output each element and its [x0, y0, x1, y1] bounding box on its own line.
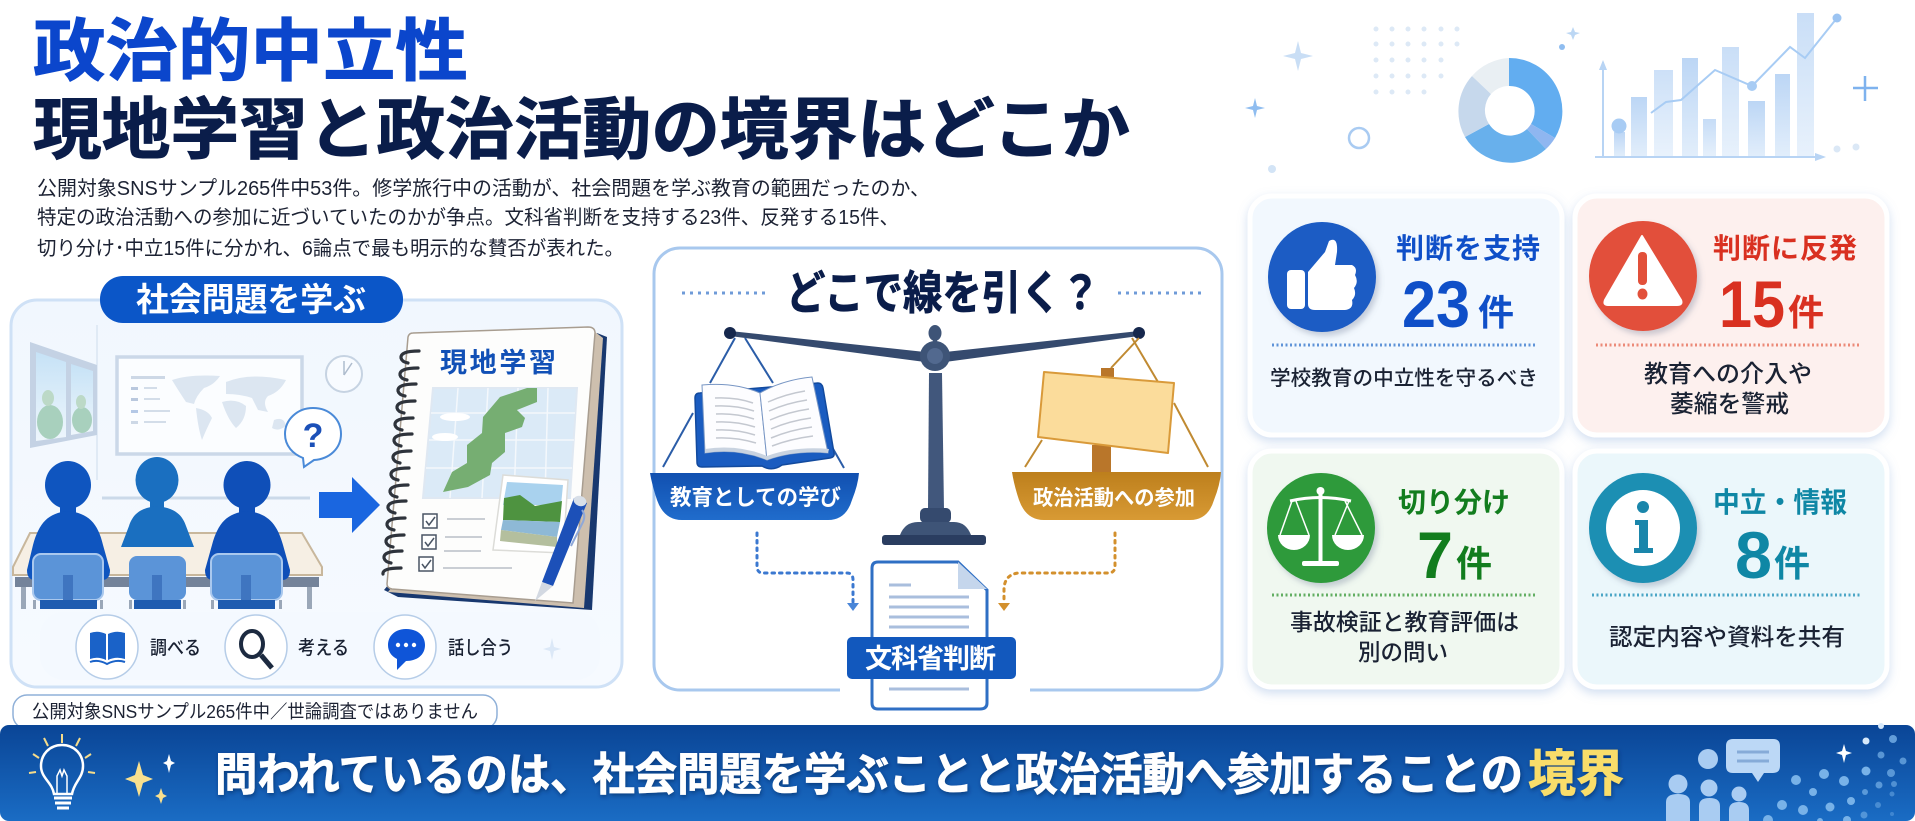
intro text block: 特定の政治活動への参加に近づいていたのかが争点。文科省判断を支持する23件、反発する15件、 — [37, 206, 899, 229]
card: 判断を支持 23件 — [1250, 196, 1562, 435]
document: 文科省判断 — [847, 562, 1016, 709]
icon row: study actions — [76, 615, 561, 679]
notebook title: 現地学習 — [440, 348, 556, 378]
icon: sparkles — [125, 754, 175, 804]
action: 調べる — [76, 615, 201, 679]
title: 政治的中立性: 政治的中立性 — [33, 14, 468, 90]
arrow — [319, 477, 380, 533]
icon: question speech bubble — [285, 408, 341, 467]
notebook map — [423, 388, 577, 498]
bar and line chart — [1595, 13, 1842, 161]
action: 調べる: 調べる — [150, 638, 201, 659]
icon: light bulb — [29, 734, 95, 808]
icon: information — [1589, 473, 1697, 583]
description: 学校教育の中立性を守るべき — [1270, 367, 1538, 390]
document: 文科省判断: 文科省判断 — [865, 644, 996, 674]
count — [1402, 267, 1514, 341]
description: 別の問い — [1358, 639, 1448, 665]
icon: thumbs up — [1268, 222, 1376, 332]
action: 話し合う: 話し合う — [448, 637, 513, 659]
banner message: 問われているのは、社会問題を学ぶことと政治活動へ参加することの — [215, 749, 1523, 800]
count: 8 — [1735, 518, 1772, 592]
intro text block: 公開対象SNSサンプル265件中53件。修学旅行中の活動が、社会問題を学ぶ教育の範囲だったのか、 — [37, 177, 930, 200]
notebook photo — [493, 475, 568, 553]
student: centre — [121, 457, 194, 609]
student: right — [205, 461, 290, 609]
description: 萎縮を警戒 — [1670, 391, 1789, 418]
blank placard — [1038, 372, 1174, 453]
card: 判断に反発 15件 — [1575, 196, 1887, 435]
description: 事故検証と教育評価は — [1290, 609, 1519, 635]
icon: clock — [326, 356, 362, 392]
count: 15 — [1719, 267, 1785, 341]
heading: 判断を支持 — [1396, 233, 1540, 264]
description — [1644, 361, 1812, 418]
dotted arrow: politics to ruling — [998, 533, 1115, 611]
description: 認定内容や資料を共有 — [1609, 624, 1845, 650]
whiteboard world map — [117, 357, 302, 454]
footnote pill — [13, 695, 497, 729]
count — [1719, 267, 1824, 341]
student: left — [27, 461, 110, 609]
dotted arrow: education to ruling — [757, 533, 859, 611]
description: 教育への介入や — [1644, 361, 1812, 388]
heading: 切り分け — [1398, 487, 1510, 518]
description — [1290, 609, 1519, 665]
notebook checklist — [419, 514, 512, 571]
donut chart — [1458, 58, 1562, 163]
pill heading: 社会問題を学ぶ — [136, 281, 366, 318]
students — [27, 457, 290, 609]
icon: classroom window — [30, 342, 97, 448]
count — [1735, 518, 1810, 592]
left pan: book — [650, 338, 859, 520]
count: 7 — [1417, 518, 1453, 592]
intro text block — [37, 177, 930, 260]
icon: question speech bubble: ? — [303, 417, 323, 455]
banner message: 境界 — [1528, 746, 1624, 802]
panel heading: どこで線を引く？ — [786, 267, 1100, 319]
heading: 中立・情報 — [1713, 487, 1847, 518]
footnote pill: 公開対象SNSサンプル265件中／世論調査ではありません — [32, 701, 478, 722]
count: 件 — [1774, 543, 1810, 584]
decorative chart illustration — [1245, 13, 1878, 173]
notebook — [383, 327, 607, 610]
card: 切り分け 7件 — [1250, 451, 1562, 687]
icon: people with chat bubble — [1666, 739, 1780, 821]
panel: 社会問題を学ぶ — [11, 276, 622, 687]
right pan: sign: 政治活動への参加 — [1033, 487, 1195, 510]
count: 件 — [1478, 292, 1514, 333]
count: 件 — [1456, 543, 1492, 584]
count: 23 — [1402, 267, 1470, 341]
open book — [695, 377, 834, 469]
pill heading — [100, 276, 403, 323]
action: 考える: 考える — [298, 637, 349, 659]
bottom banner — [0, 723, 1915, 821]
heading: 判断に反発 — [1713, 233, 1857, 264]
action: 考える — [225, 615, 349, 679]
pen — [535, 494, 588, 601]
right pan: sign — [1012, 338, 1221, 520]
icon: scales — [1267, 473, 1375, 583]
left pan: book: 教育としての学び — [670, 485, 841, 510]
count: 件 — [1788, 292, 1824, 333]
balance scale — [724, 325, 1145, 545]
panel: どこで線を引く — [650, 248, 1222, 709]
intro text block: 切り分け･中立15件に分かれ、6論点で最も明示的な賛否が表れた。 — [37, 237, 624, 260]
desk — [13, 533, 322, 609]
subtitle: 現地学習と政治活動の境界はどこか: 現地学習と政治活動の境界はどこか — [33, 93, 1130, 168]
action: 話し合う — [374, 615, 513, 679]
card: 中立・情報 8件 — [1575, 451, 1887, 687]
count — [1417, 518, 1492, 592]
notebook spiral — [383, 351, 419, 574]
decorative dots — [1763, 723, 1906, 821]
icon: warning — [1589, 221, 1697, 331]
